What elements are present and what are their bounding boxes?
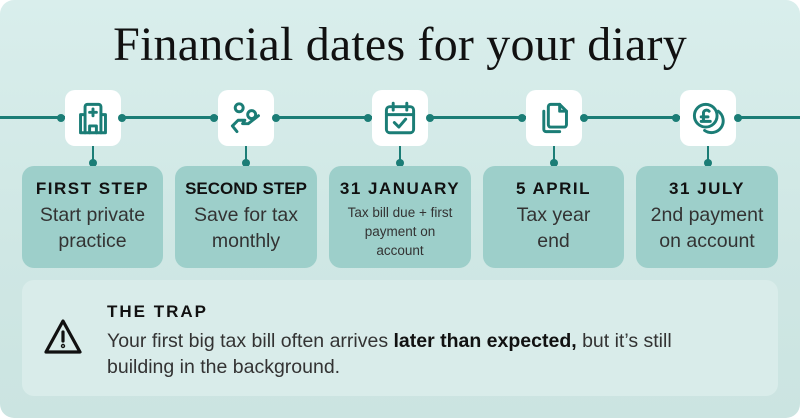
panel: the trap xyxy=(22,280,778,396)
card: 31 january xyxy=(329,166,471,268)
card: second step: Save for tax xyxy=(194,204,298,226)
trap text: building in the background. xyxy=(107,356,340,378)
icon: saving hand xyxy=(218,90,274,146)
card: first step: practice xyxy=(58,230,127,252)
card: 5 april xyxy=(483,166,624,268)
card: 31 july: on account xyxy=(659,230,755,252)
card: first step: Start private xyxy=(40,204,145,226)
card: 5 april: Tax year xyxy=(517,204,590,226)
card: 31 july: 31 JULY xyxy=(669,179,745,198)
card: second step xyxy=(175,166,317,268)
trap text: Your first big tax bill often arrives later than expected, but it’s still xyxy=(107,330,672,352)
card: 31 july xyxy=(636,166,778,268)
card: 31 january: payment on xyxy=(365,224,435,239)
card: second step: monthly xyxy=(212,230,280,252)
timeline line xyxy=(0,116,800,119)
card: 31 january: account xyxy=(376,243,424,258)
card: first step xyxy=(22,166,163,268)
card: first step: FIRST STEP xyxy=(36,179,149,198)
card: 5 april: end xyxy=(537,230,570,252)
card: 31 january: Tax bill due + first xyxy=(348,205,452,220)
card: 31 january: 31 JANUARY xyxy=(340,179,460,198)
title: Financial dates for your diary xyxy=(113,18,687,71)
icon: calendar xyxy=(372,90,428,146)
icon: warning xyxy=(44,319,82,354)
trap text xyxy=(107,330,672,378)
icon: documents xyxy=(526,90,582,146)
card: second step: SECOND STEP xyxy=(185,179,307,198)
icon: pound coins xyxy=(680,90,736,146)
trap heading: THE TRAP xyxy=(107,302,208,321)
card: 5 april: 5 APRIL xyxy=(516,179,591,198)
icon: hospital xyxy=(65,90,121,146)
card: 31 july: 2nd payment xyxy=(651,204,763,226)
